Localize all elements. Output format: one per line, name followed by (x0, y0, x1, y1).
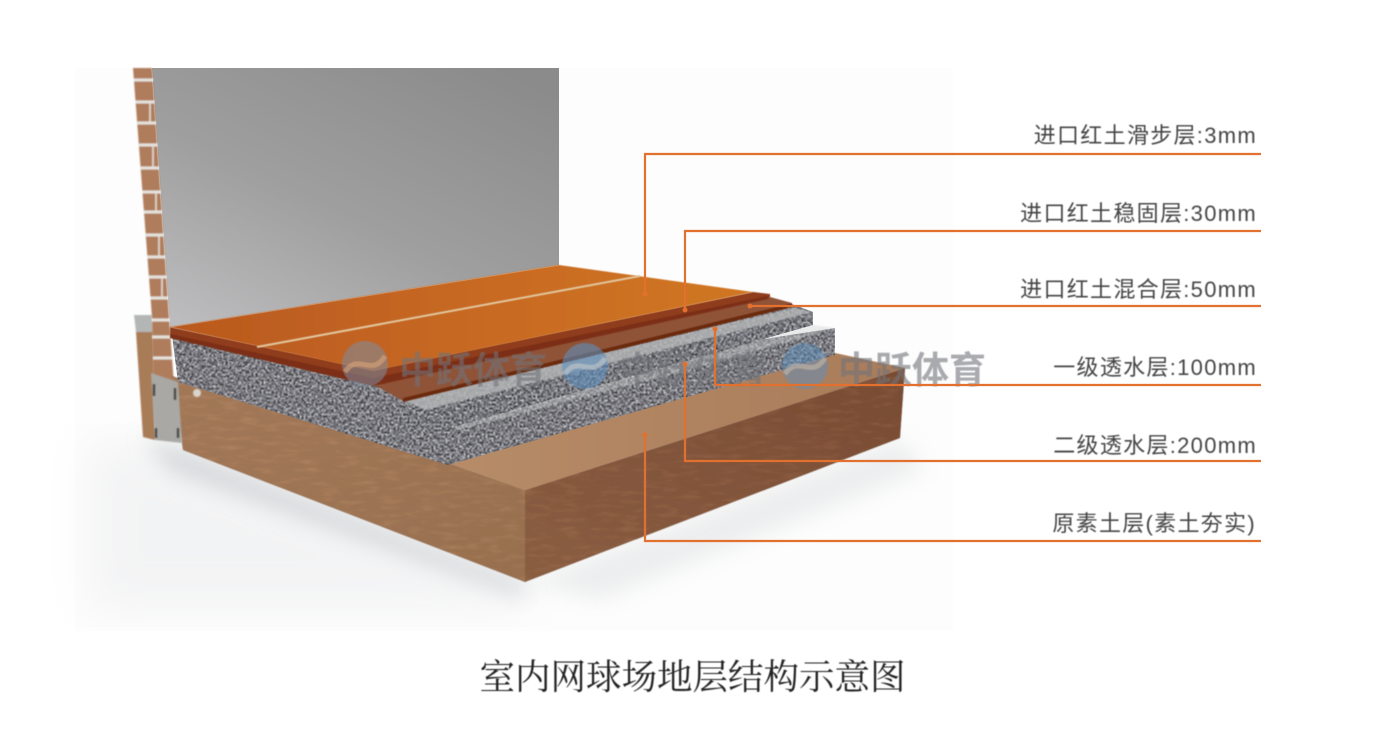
watermark (342, 341, 986, 391)
layer: clay stabilising (170, 292, 770, 386)
callout: original soil layer (642, 432, 1261, 541)
callout: original soil layer: 原素土层(素土夯实) (1052, 511, 1256, 536)
layer: clay sliding surface (170, 265, 753, 371)
plinth (134, 315, 155, 440)
watermark: 中跃体育 (619, 350, 767, 391)
callout: stabilising layer (682, 201, 1261, 312)
layer: first drainage gravel (403, 304, 813, 433)
back wall (152, 68, 559, 327)
layer: original soil (172, 353, 905, 582)
watermark: 中跃体育 (838, 350, 986, 391)
callout: sliding layer: 进口红土滑步层:3mm (1034, 123, 1257, 148)
callout: stabilising layer: 进口红土稳固层:30mm (1020, 201, 1257, 226)
callout: mixing layer (748, 277, 1261, 308)
layer: clay mixing (373, 297, 792, 402)
layer: second drainage gravel (172, 325, 835, 465)
watermark: 中跃体育 (399, 350, 547, 391)
court line (257, 276, 640, 347)
callout: first drainage layer (712, 326, 1261, 385)
faint photo background (75, 68, 953, 631)
callout: sliding layer (642, 123, 1261, 296)
access box (151, 373, 201, 443)
callout: second drainage layer: 二级透水层:200mm (1053, 433, 1257, 458)
floor shadow (90, 437, 925, 610)
callout: mixing layer: 进口红土混合层:50mm (1020, 277, 1257, 302)
brick column (133, 68, 174, 385)
title: 室内网球场地层结构示意图 (479, 657, 906, 697)
callout: first drainage layer: 一级透水层:100mm (1053, 355, 1257, 380)
callout: second drainage layer (682, 362, 1261, 461)
